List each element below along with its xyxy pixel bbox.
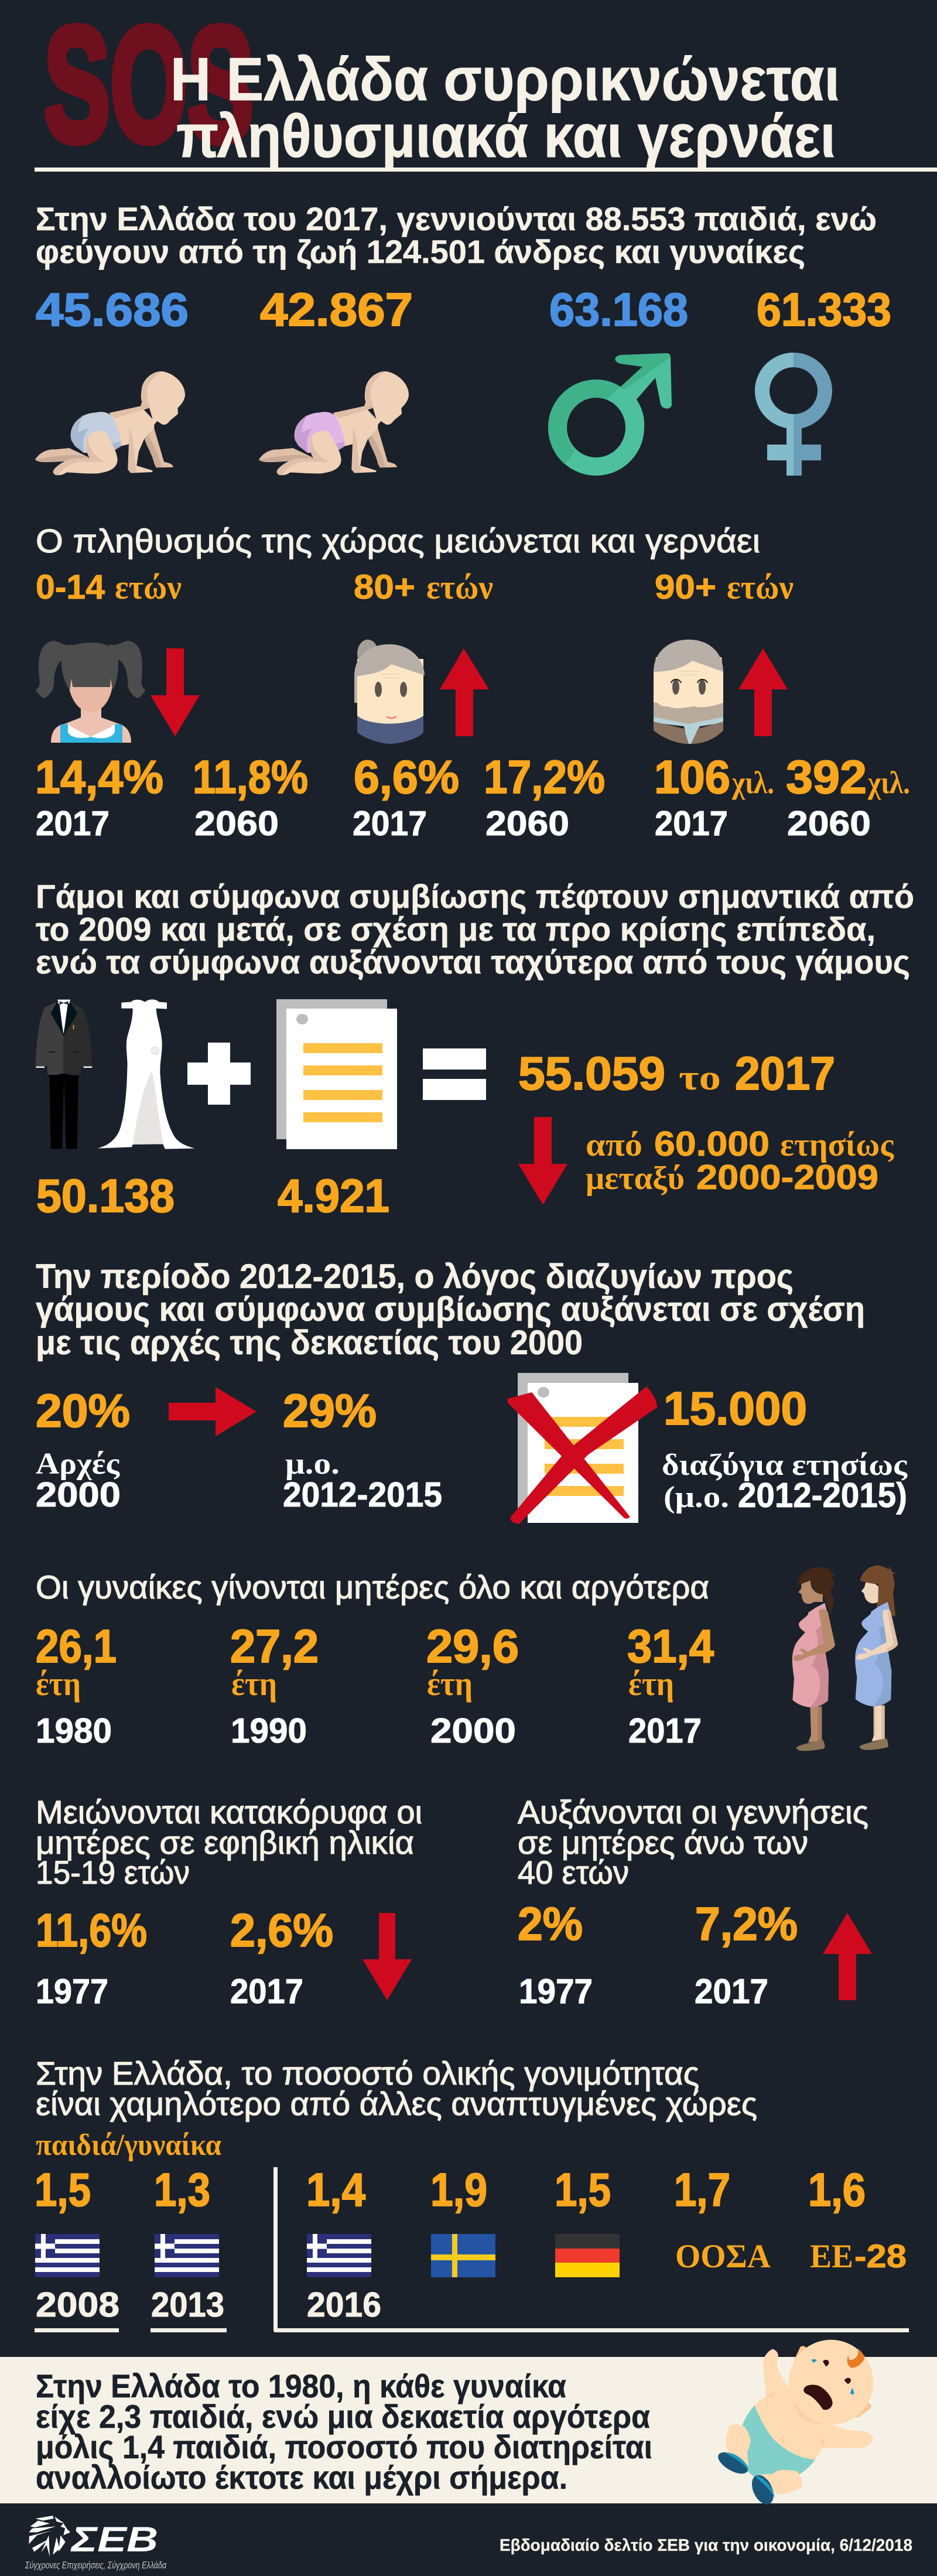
stat: total 2017: το (679, 1058, 721, 1097)
values row: 1,7 (674, 2164, 730, 2216)
stat: 1977 over 40: 2% (518, 1898, 583, 1950)
stat: 90+ count: 392 (786, 751, 867, 803)
stat: 2017 teens: 2,6% (230, 1904, 333, 1956)
stat: 1980: 1980 (36, 1711, 112, 1750)
values row (35, 2164, 866, 2216)
stat: 15,000 divorces: (μ.ο. (664, 1481, 729, 1514)
year labels (36, 2285, 381, 2324)
label: EU-28: ΕΕ (810, 2238, 853, 2275)
heading: divorces: Την περίοδο 2012-2015, ο λόγος διαζυγίων προς (36, 1258, 794, 1296)
stat: 20 percent (36, 1385, 130, 1514)
heading: fertility (36, 2055, 757, 2122)
stat: 90+ count (654, 751, 910, 843)
stat: 80+ share (353, 751, 605, 843)
stat: total 2017: 55.059 (518, 1047, 665, 1099)
stat: 2000: έτη (427, 1665, 473, 1703)
heading: population ageing: Ο πληθυσμός της χώρας μειώνεται και γερνάει (36, 522, 760, 560)
values row: 1,6 (808, 2164, 866, 2216)
values row: 1,3 (154, 2164, 210, 2216)
stat: 0-14 share: 2017 (36, 804, 110, 843)
heading: births and deaths: Στην Ελλάδα του 2017, γεννιούνται 88.553 παιδιά, ενώ (36, 200, 877, 237)
flag: Germany (555, 2234, 620, 2277)
icon: female symbol (755, 353, 832, 476)
stat: 80+ share: 2060 (485, 804, 569, 843)
stat: 80+ share: 17,2% (484, 751, 605, 803)
icon: grandfather (654, 640, 723, 744)
stat: 1980: έτη (36, 1665, 81, 1703)
arrow: down (518, 1117, 567, 1205)
panel: marriages and partnerships (36, 878, 914, 1222)
callout: from 60,000: 2000-2009 (696, 1158, 878, 1197)
stat: 20 percent: 20% (36, 1385, 130, 1437)
arrow: right (169, 1387, 257, 1436)
heading: mothers over 40: 40 ετών (518, 1854, 629, 1891)
panel: births and deaths 2017 (35, 200, 891, 476)
panel: teen mothers (36, 1793, 422, 2011)
stat: 1990: έτη (231, 1665, 277, 1703)
icon: wedding dress (97, 999, 195, 1149)
heading: divorces: με τις αρχές της δεκαετίας του 2000 (36, 1324, 583, 1362)
source note: Εβδομαδιαίο δελτίο ΣΕΒ για την οικονομία, 6/12/2018 (500, 2536, 912, 2555)
heading: marriages: ενώ τα σύμφωνα αυξάνονται ταχύτερα από τους γάμους (36, 944, 910, 981)
stat: 2017 over 40 (695, 1898, 798, 2011)
icon: plus (187, 1043, 251, 1105)
year labels: 2016 (307, 2285, 381, 2324)
heading: teen mothers (36, 1793, 422, 1891)
stat: 1977 over 40 (518, 1898, 593, 2011)
heading: mothers over 40: σε μητέρες άνω των (518, 1824, 808, 1861)
heading: teen mothers: Μειώνονται κατακόρυφα οι (36, 1793, 422, 1830)
stat: 2000: 2000 (430, 1711, 516, 1750)
heading: fertility: Στην Ελλάδα, το ποσοστό ολικής γονιμότητας (36, 2055, 699, 2092)
stat: 1977 teens: 1977 (36, 1972, 108, 2011)
values row: 1,5 (35, 2164, 91, 2216)
number: marriages: 50.138 (36, 1170, 175, 1222)
heading: mothers over 40: Αυξάνονται οι γεννήσεις (518, 1793, 868, 1830)
stat: 2017 over 40: 2017 (695, 1972, 768, 2011)
heading: births and deaths (36, 200, 877, 270)
label: age 90+ (655, 568, 794, 606)
arrow: up (738, 648, 788, 736)
flag: Sweden (431, 2234, 495, 2277)
heading: births and deaths: φεύγουν από τη ζωή 124.501 άνδρες και γυναίκες (36, 233, 805, 270)
label: age 0-14 (36, 568, 182, 606)
flag: Greece 2008 (35, 2234, 100, 2277)
label: age 90+: 90+ (655, 568, 716, 606)
heading: mothers over 40 (518, 1793, 868, 1891)
heading: teen mothers: μητέρες σε εφηβική ηλικία (36, 1824, 414, 1861)
stat: 29 percent: μ.ο. (285, 1447, 340, 1481)
icon: girl (36, 641, 145, 743)
icon: crawling baby pink diaper (259, 371, 409, 475)
arrow: up (440, 648, 489, 736)
stat: 2000: 29,6 (426, 1620, 519, 1672)
logo: SEV (25, 2516, 167, 2571)
number: female deaths: 61.333 (757, 283, 891, 336)
logo tagline: Σύγχρονες Επιχειρήσεις, Σύγχρονη Ελλάδα (25, 2560, 167, 2571)
stat: 2000 (426, 1620, 519, 1750)
stat: 1980 (36, 1620, 117, 1750)
icon: tuxedo (36, 1000, 92, 1149)
year labels: 2008 (36, 2285, 119, 2324)
logo wordmark: ΣΕΒ (70, 2520, 158, 2559)
stat: 29 percent (283, 1385, 442, 1514)
stat: 1977 over 40: 1977 (519, 1972, 593, 2011)
heading: marriages (36, 878, 914, 981)
callout: from 60,000: από (586, 1127, 642, 1163)
stat: 1990: 1990 (231, 1711, 307, 1750)
icon: crossed-out document (508, 1373, 657, 1524)
label: age 80+: 80+ (354, 568, 415, 606)
values row: 1,4 (306, 2164, 365, 2216)
stat: 80+ share: 2017 (353, 804, 427, 843)
arrow: down (151, 648, 200, 736)
stat: 0-14 share: 14,4% (35, 751, 163, 803)
number: boys born: 45.686 (36, 283, 189, 336)
icon: SEV starburst (29, 2516, 70, 2557)
stat: 90+ count: χιλ. (731, 765, 774, 800)
stat: 15,000 divorces: διαζύγια ετησίως (662, 1448, 908, 1482)
stat: 0-14 share (35, 751, 308, 843)
number: male deaths: 63.168 (549, 283, 688, 336)
icon: crying baby (714, 2340, 873, 2508)
stat: 29 percent: 29% (283, 1385, 377, 1437)
title (170, 46, 840, 170)
panel: divorces (36, 1258, 908, 1524)
callout: from 60,000 (586, 1125, 894, 1197)
heading: teen mothers: 15-19 ετών (36, 1854, 190, 1891)
heading: divorces: γάμους και σύμφωνα συμβίωσης αυξάνεται σε σχέση (36, 1290, 865, 1328)
heading: divorces (36, 1258, 865, 1362)
stat: 1990: 27,2 (230, 1620, 319, 1672)
stat: 20 percent: 2000 (36, 1475, 121, 1514)
stat: 29 percent: 2012-2015 (283, 1475, 442, 1514)
title: πληθυσμιακά και γερνάει (176, 103, 836, 170)
icon: pregnant women (792, 1565, 898, 1751)
stat: 1977 teens (36, 1904, 147, 2011)
stat: 2017: 2017 (628, 1711, 702, 1750)
number: partnerships: 4.921 (278, 1170, 389, 1222)
arrow: up (823, 1913, 872, 2000)
label: age 90+: ετών (727, 568, 794, 606)
stat: 2017 teens (230, 1904, 333, 2011)
callout text: είχε 2,3 παιδιά, ενώ μια δεκαετία αργότερα (36, 2398, 650, 2435)
values row: 1,9 (430, 2164, 487, 2216)
panel: closing callout (0, 2340, 937, 2508)
stat: 2017: 31,4 (627, 1620, 714, 1672)
panel: age of motherhood (36, 1565, 898, 1751)
callout text: μόλις 1,4 παιδιά, ποσοστό που διατηρείται (36, 2428, 652, 2465)
stat: 1980: 26,1 (36, 1620, 117, 1672)
stat: total 2017: 2017 (735, 1047, 835, 1099)
heading: marriages: το 2009 και μετά, σε σχέση με τα προ κρίσης επίπεδα, (36, 911, 876, 948)
label: EU-28: -28 (854, 2237, 907, 2274)
stat: 15,000 divorces: 15.000 (664, 1382, 807, 1434)
icon: crawling baby blue diaper (35, 371, 185, 475)
label: age 0-14: ετών (115, 568, 182, 606)
stat: 90+ count: 2017 (655, 804, 728, 843)
title: Η Ελλάδα συρρικνώνεται (170, 46, 840, 114)
callout: from 60,000: 60.000 (654, 1125, 770, 1163)
stat: 1977 teens: 11,6% (36, 1904, 147, 1956)
stat: 0-14 share: 11,8% (193, 751, 308, 803)
stat: 80+ share: 6,6% (354, 751, 459, 803)
unit label: children per woman: παιδιά/γυναίκα (36, 2129, 221, 2162)
icon: equals (423, 1048, 486, 1100)
label: age 80+ (354, 568, 493, 606)
heading: marriages: Γάμοι και σύμφωνα συμβίωσης πέφτουν σημαντικά από (36, 878, 914, 915)
callout text: αναλλοίωτο έκτοτε και μέχρι σήμερα. (36, 2459, 567, 2496)
panel: fertility rate (35, 2055, 909, 2332)
icon: male symbol (548, 353, 672, 476)
panel: ageing population (35, 522, 910, 843)
callout text (36, 2367, 652, 2496)
callout: from 60,000: ετησίως (780, 1127, 894, 1163)
stat: total 2017 (518, 1047, 835, 1099)
callout: from 60,000: μεταξύ (586, 1160, 685, 1197)
label: EU-28 (810, 2237, 907, 2275)
flag: Greece 2016 (307, 2234, 371, 2277)
label: age 0-14: 0-14 (36, 568, 105, 606)
stat: 2017 (627, 1620, 714, 1750)
heading: fertility: είναι χαμηλότερο από άλλες αναπτυγμένες χώρες (36, 2085, 757, 2122)
label: age 80+: ετών (426, 568, 493, 606)
stat: 15,000 divorces (662, 1382, 908, 1515)
stat: 0-14 share: 2060 (194, 804, 279, 843)
stat: 90+ count: χιλ. (867, 765, 910, 800)
stat: 1990 (230, 1620, 319, 1750)
stat: 20 percent: Αρχές (36, 1447, 120, 1481)
label: OECD: ΟΟΣΑ (675, 2238, 771, 2275)
stat: 2017: έτη (628, 1665, 674, 1703)
callout text: Στην Ελλάδα το 1980, η κάθε γυναίκα (36, 2367, 566, 2404)
stat: 2017 over 40: 7,2% (695, 1898, 798, 1950)
stat: 2017 teens: 2017 (230, 1972, 303, 2011)
arrow: down (363, 1913, 412, 2000)
panel: mothers over 40 (518, 1793, 872, 2011)
heading: motherhood: Οι γυναίκες γίνονται μητέρες όλο και αργότερα (36, 1569, 709, 1605)
icon: document (276, 999, 397, 1149)
year labels: 2013 (151, 2285, 224, 2324)
stat: 90+ count: 2060 (787, 804, 871, 843)
icon: grandmother (354, 640, 425, 744)
values row: 1,5 (555, 2164, 611, 2216)
stat: 15,000 divorces: 2012-2015) (738, 1476, 907, 1515)
flag: Greece 2013 (155, 2234, 219, 2277)
stat: 90+ count: 106 (654, 751, 730, 803)
number: girls born: 42.867 (260, 283, 413, 336)
